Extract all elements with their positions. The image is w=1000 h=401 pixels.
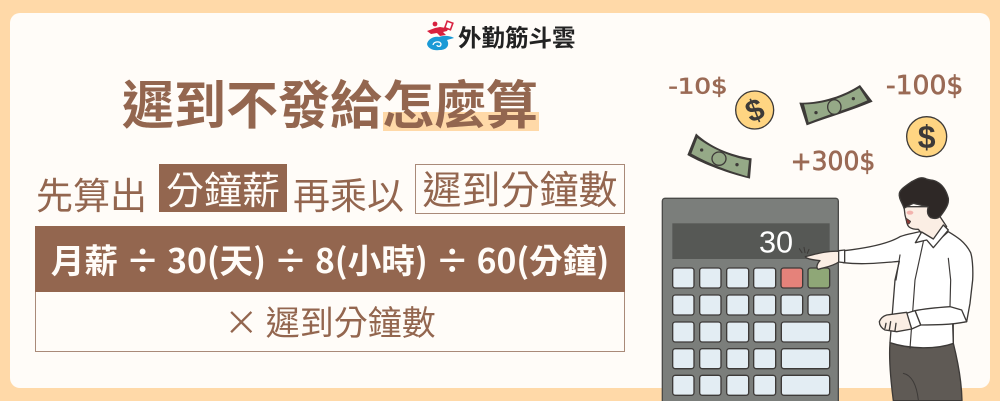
subtitle: first step text: 先算出 <box>36 166 147 220</box>
tap marks <box>799 247 809 253</box>
logo: 外勤筋斗雲 <box>427 19 576 53</box>
subtitle: salary-per-minute tag: 分鐘薪 <box>166 160 280 215</box>
icon: coin right <box>907 117 947 157</box>
calculator display <box>672 223 830 260</box>
hand and finger pointing <box>805 251 839 269</box>
subtitle: late-minutes tag: 遲到分鐘數 <box>422 160 618 216</box>
icon: banknote top <box>799 85 873 125</box>
money label: -10$: -10$ <box>668 74 728 99</box>
subtitle: second step text: 再乘以 <box>293 166 404 220</box>
cheek and mouth <box>906 211 913 224</box>
face and neck <box>904 207 947 245</box>
cuff <box>839 250 845 263</box>
shirt seam lines <box>896 242 953 348</box>
hair <box>899 178 948 219</box>
money label: +300$: +300$ <box>791 146 875 176</box>
calculator keys <box>673 268 830 395</box>
money label: -100$: -100$ <box>886 70 963 100</box>
icon: coin right: $ <box>918 119 936 155</box>
icon: banknote left <box>687 133 752 179</box>
icon: runner on cloud <box>427 20 454 50</box>
title highlight <box>383 112 539 131</box>
formula top row: 月薪 ÷ 30(天) ÷ 8(小時) ÷ 60(分鐘) <box>51 234 609 283</box>
trousers <box>890 343 962 401</box>
logo wordmark: 外勤筋斗雲 <box>458 19 576 53</box>
lower hand <box>879 312 912 332</box>
man pointing at calculator <box>799 178 973 401</box>
formula panel <box>35 226 625 352</box>
lower arm sleeve <box>915 307 967 325</box>
collar <box>915 225 948 248</box>
title: 遲到不發給怎麼算 <box>122 64 538 139</box>
shirt <box>843 232 973 348</box>
calculator display: 30 <box>759 226 793 260</box>
calculator <box>662 198 838 401</box>
formula bottom row: × 遲到分鐘數 <box>224 296 436 345</box>
icon: coin left: $ <box>741 92 769 130</box>
formula bottom row <box>35 292 625 352</box>
trouser fold <box>903 373 918 400</box>
sleeve cuff <box>906 311 921 329</box>
